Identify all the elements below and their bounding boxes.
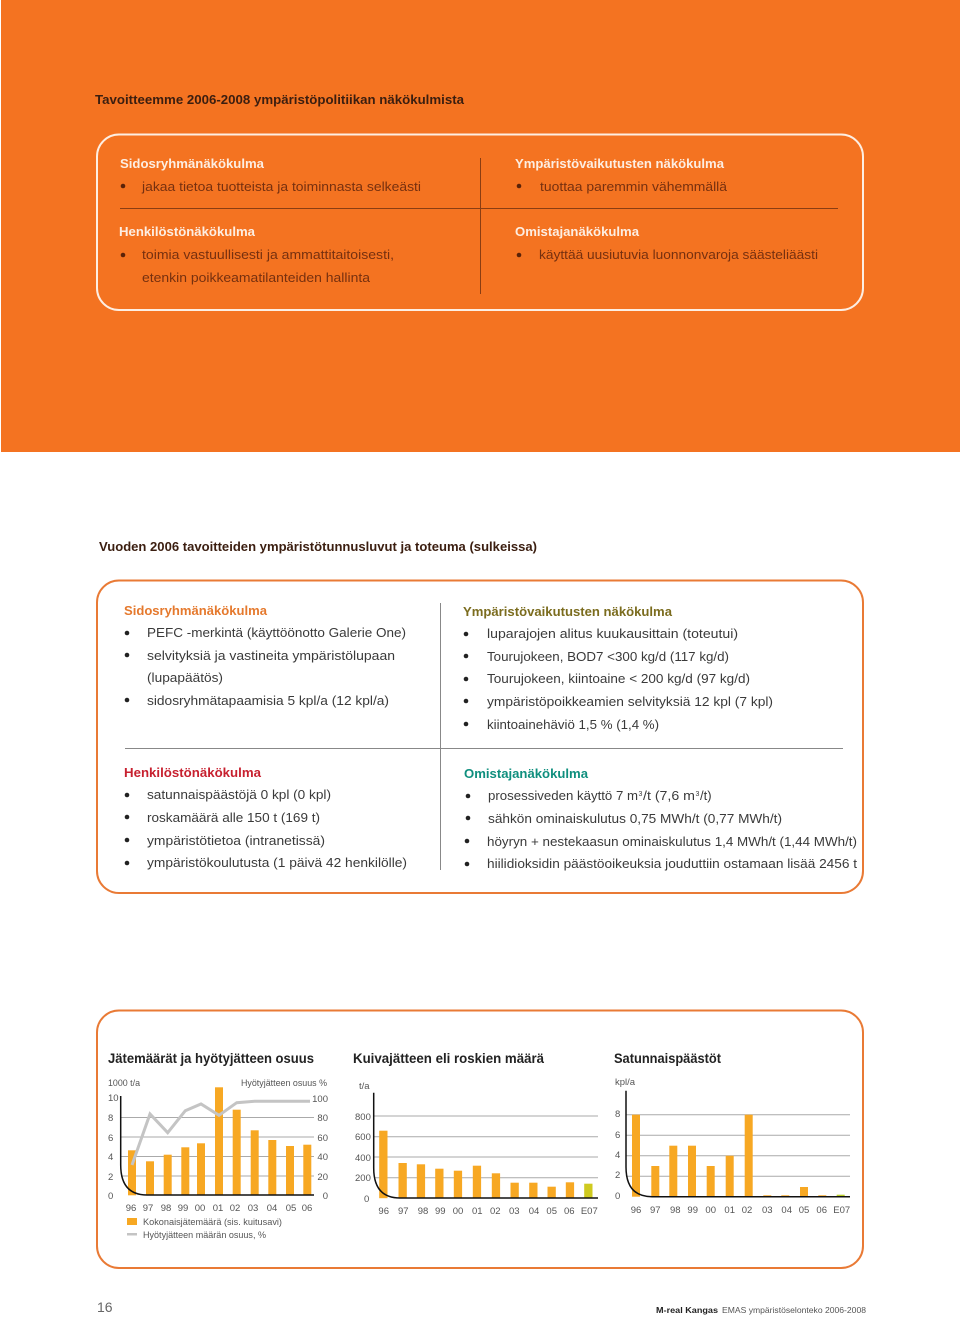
- personnel indicators: ympäristökoulutusta (1 päivä 42 henkilölle): [147, 855, 407, 870]
- axis labels: 40: [317, 1152, 328, 1163]
- stakeholder viewpoint: [120, 156, 421, 194]
- axis labels: 05: [286, 1203, 296, 1214]
- axis labels: 96: [378, 1206, 389, 1217]
- owner indicators: Omistajanäkökulma: [464, 766, 589, 781]
- environmental impact viewpoint: [515, 156, 728, 194]
- personnel viewpoint: [119, 224, 394, 285]
- owner viewpoint: käyttää uusiutuvia luonnonvaroja säästeliäästi: [539, 247, 818, 262]
- legend: Kokonaisjätemäärä (sis. kuitusavi): [143, 1217, 282, 1228]
- personnel indicators: [124, 765, 407, 870]
- axis labels: 8: [615, 1109, 620, 1120]
- axis labels: 03: [248, 1203, 258, 1214]
- footer text: [656, 1305, 866, 1315]
- stakeholder indicators: sidosryhmätapaamisia 5 kpl/a (12 kpl/a): [147, 693, 389, 708]
- owner viewpoint: [515, 224, 818, 262]
- axis labels: 400: [355, 1153, 371, 1164]
- axis labels: 97: [143, 1203, 153, 1214]
- title: policy viewpoints: Tavoitteemme 2006-2008 ympäristöpolitiikan näkökulmista: [95, 92, 465, 107]
- panel: 2006 indicators: [97, 580, 863, 893]
- axis labels: 06: [564, 1206, 575, 1217]
- owner indicators: /t (7,6 m: [643, 788, 695, 803]
- axis labels: 8: [108, 1113, 113, 1124]
- owner indicators: 3: [638, 791, 642, 798]
- personnel indicators: roskamäärä alle 150 t (169 t): [147, 810, 320, 825]
- axis labels: 01: [724, 1205, 735, 1216]
- axis labels: 04: [781, 1205, 792, 1216]
- chart: dry waste: [353, 1051, 598, 1217]
- axis labels: 96: [631, 1205, 641, 1216]
- axis labels: 05: [799, 1205, 809, 1216]
- chart title: Jätemäärät ja hyötyjätteen osuus: [108, 1051, 314, 1066]
- footer text: EMAS ympäristöselonteko 2006-2008: [722, 1305, 866, 1315]
- owner viewpoint: Omistajanäkökulma: [515, 224, 640, 239]
- axis labels: 2: [615, 1170, 620, 1181]
- axis labels: [615, 1077, 850, 1216]
- environmental indicators: ympäristöpoikkeamien selvityksiä 12 kpl (7 kpl): [487, 694, 773, 709]
- environmental indicators: luparajojen alitus kuukausittain (toteutui): [487, 626, 738, 641]
- axis labels: 04: [267, 1203, 277, 1214]
- owner indicators: höyryn + nestekaasun ominaiskulutus 1,4 MWh/t (1,44 MWh/t): [487, 834, 857, 849]
- owner indicators: /t): [700, 788, 712, 803]
- personnel indicators: ympäristötietoa (intranetissä): [147, 833, 325, 848]
- axis labels: 99: [687, 1205, 698, 1216]
- axis labels: 4: [108, 1152, 113, 1163]
- axis labels: 00: [705, 1205, 716, 1216]
- axis labels: 4: [615, 1150, 620, 1161]
- personnel viewpoint: etenkin poikkeamatilanteiden hallinta: [142, 270, 371, 285]
- axis: [121, 1096, 314, 1195]
- axis labels: 06: [302, 1203, 312, 1214]
- bars: [128, 1087, 311, 1195]
- axis labels: 99: [178, 1203, 188, 1214]
- environmental indicators: kiintoainehäviö 1,5 % (1,4 %): [487, 717, 659, 732]
- stakeholder indicators: selvityksiä ja vastineita ympäristölupaan: [147, 648, 395, 663]
- axis labels: 0: [323, 1191, 328, 1202]
- axis labels: 98: [418, 1206, 428, 1217]
- axis labels: 10: [108, 1093, 119, 1104]
- axis labels: 05: [546, 1206, 557, 1217]
- axis labels: 6: [615, 1130, 620, 1141]
- page number: 16: [97, 1299, 113, 1315]
- axis labels: 6: [108, 1133, 113, 1144]
- owner indicators: hiilidioksidin päästöoikeuksia jouduttiin ostamaan lisää 2456 t: [487, 856, 857, 871]
- chart: accidental emissions: [614, 1051, 850, 1216]
- axis labels: 1000 t/a: [108, 1078, 141, 1089]
- environmental impact viewpoint: Ympäristövaikutusten näkökulma: [515, 156, 725, 171]
- axis labels: 96: [126, 1203, 136, 1214]
- owner indicators: 3: [696, 791, 700, 798]
- axis labels: [108, 1078, 328, 1214]
- panel: policy viewpoints: [97, 134, 863, 310]
- recycled share line: [132, 1101, 310, 1165]
- axis labels: 04: [529, 1206, 539, 1217]
- orange header band: [1, 0, 960, 452]
- axis: [626, 1091, 850, 1197]
- stakeholder indicators: [124, 603, 406, 708]
- axis labels: 100: [312, 1094, 328, 1105]
- axis labels: 99: [435, 1206, 446, 1217]
- axis labels: 0: [615, 1191, 620, 1202]
- axis labels: 600: [355, 1132, 371, 1143]
- bars: [632, 1115, 845, 1197]
- axis labels: E07: [581, 1206, 598, 1217]
- axis labels: t/a: [359, 1081, 370, 1092]
- chart title: Kuivajätteen eli roskien määrä: [353, 1051, 544, 1066]
- personnel indicators: Henkilöstönäkökulma: [124, 765, 262, 780]
- axis labels: 0: [108, 1191, 113, 1202]
- stakeholder viewpoint: jakaa tietoa tuotteista ja toiminnasta selkeästi: [141, 179, 421, 194]
- environmental indicators: Ympäristövaikutusten näkökulma: [463, 604, 673, 619]
- axis labels: 97: [650, 1205, 661, 1216]
- owner indicators: prosessiveden käyttö 7 m: [488, 788, 638, 803]
- heading: 2006 targets: Vuoden 2006 tavoitteiden ympäristötunnusluvut ja toteuma (sulkeissa): [99, 539, 537, 554]
- axis labels: 60: [317, 1133, 328, 1144]
- axis labels: 200: [355, 1173, 371, 1184]
- axis labels: 03: [762, 1205, 773, 1216]
- environmental indicators: Tourujokeen, BOD7 <300 kg/d (117 kg/d): [487, 649, 729, 664]
- stakeholder indicators: (lupapäätös): [147, 670, 223, 685]
- personnel viewpoint: Henkilöstönäkökulma: [119, 224, 256, 239]
- axis labels: kpl/a: [615, 1077, 636, 1088]
- axis labels: Hyötyjätteen osuus %: [241, 1078, 328, 1089]
- axis labels: [355, 1081, 598, 1217]
- chart title: Satunnaispäästöt: [614, 1051, 721, 1066]
- axis labels: 00: [195, 1203, 205, 1214]
- axis labels: 03: [509, 1206, 520, 1217]
- axis labels: E07: [833, 1205, 850, 1216]
- stakeholder indicators: Sidosryhmänäkökulma: [124, 603, 268, 618]
- environmental indicators: [463, 604, 773, 732]
- axis labels: 02: [490, 1206, 501, 1217]
- axis labels: 2: [108, 1172, 113, 1183]
- axis labels: 97: [398, 1206, 409, 1217]
- axis labels: 02: [742, 1205, 752, 1216]
- stakeholder indicators: PEFC -merkintä (käyttöönotto Galerie One): [147, 625, 406, 640]
- personnel indicators: satunnaispäästöjä 0 kpl (0 kpl): [147, 787, 331, 802]
- legend: Hyötyjätteen määrän osuus, %: [143, 1230, 267, 1241]
- owner indicators: sähkön ominaiskulutus 0,75 MWh/t (0,77 MWh/t): [488, 811, 782, 826]
- axis labels: 800: [355, 1112, 371, 1123]
- stakeholder viewpoint: Sidosryhmänäkökulma: [120, 156, 265, 171]
- axis labels: 06: [816, 1205, 827, 1216]
- panel: charts: [97, 1010, 863, 1268]
- bars: [379, 1131, 592, 1198]
- axis labels: 00: [453, 1206, 463, 1217]
- footer text: M-real Kangas: [656, 1305, 718, 1315]
- axis labels: 80: [317, 1113, 328, 1124]
- environmental indicators: Tourujokeen, kiintoaine < 200 kg/d (97 kg/d): [487, 671, 750, 686]
- owner indicators: [464, 766, 857, 871]
- axis labels: 98: [670, 1205, 681, 1216]
- environmental impact viewpoint: tuottaa paremmin vähemmällä: [540, 179, 728, 194]
- axis: [374, 1093, 598, 1198]
- axis labels: 01: [213, 1203, 223, 1214]
- axis labels: 01: [472, 1206, 483, 1217]
- legend: [127, 1217, 282, 1241]
- chart: waste amounts and recycled share: [108, 1051, 328, 1241]
- personnel viewpoint: toimia vastuullisesti ja ammattitaitoisesti,: [142, 247, 394, 262]
- axis labels: 02: [230, 1203, 240, 1214]
- axis labels: 0: [364, 1194, 369, 1205]
- axis labels: 20: [317, 1172, 328, 1183]
- axis labels: 98: [161, 1203, 171, 1214]
